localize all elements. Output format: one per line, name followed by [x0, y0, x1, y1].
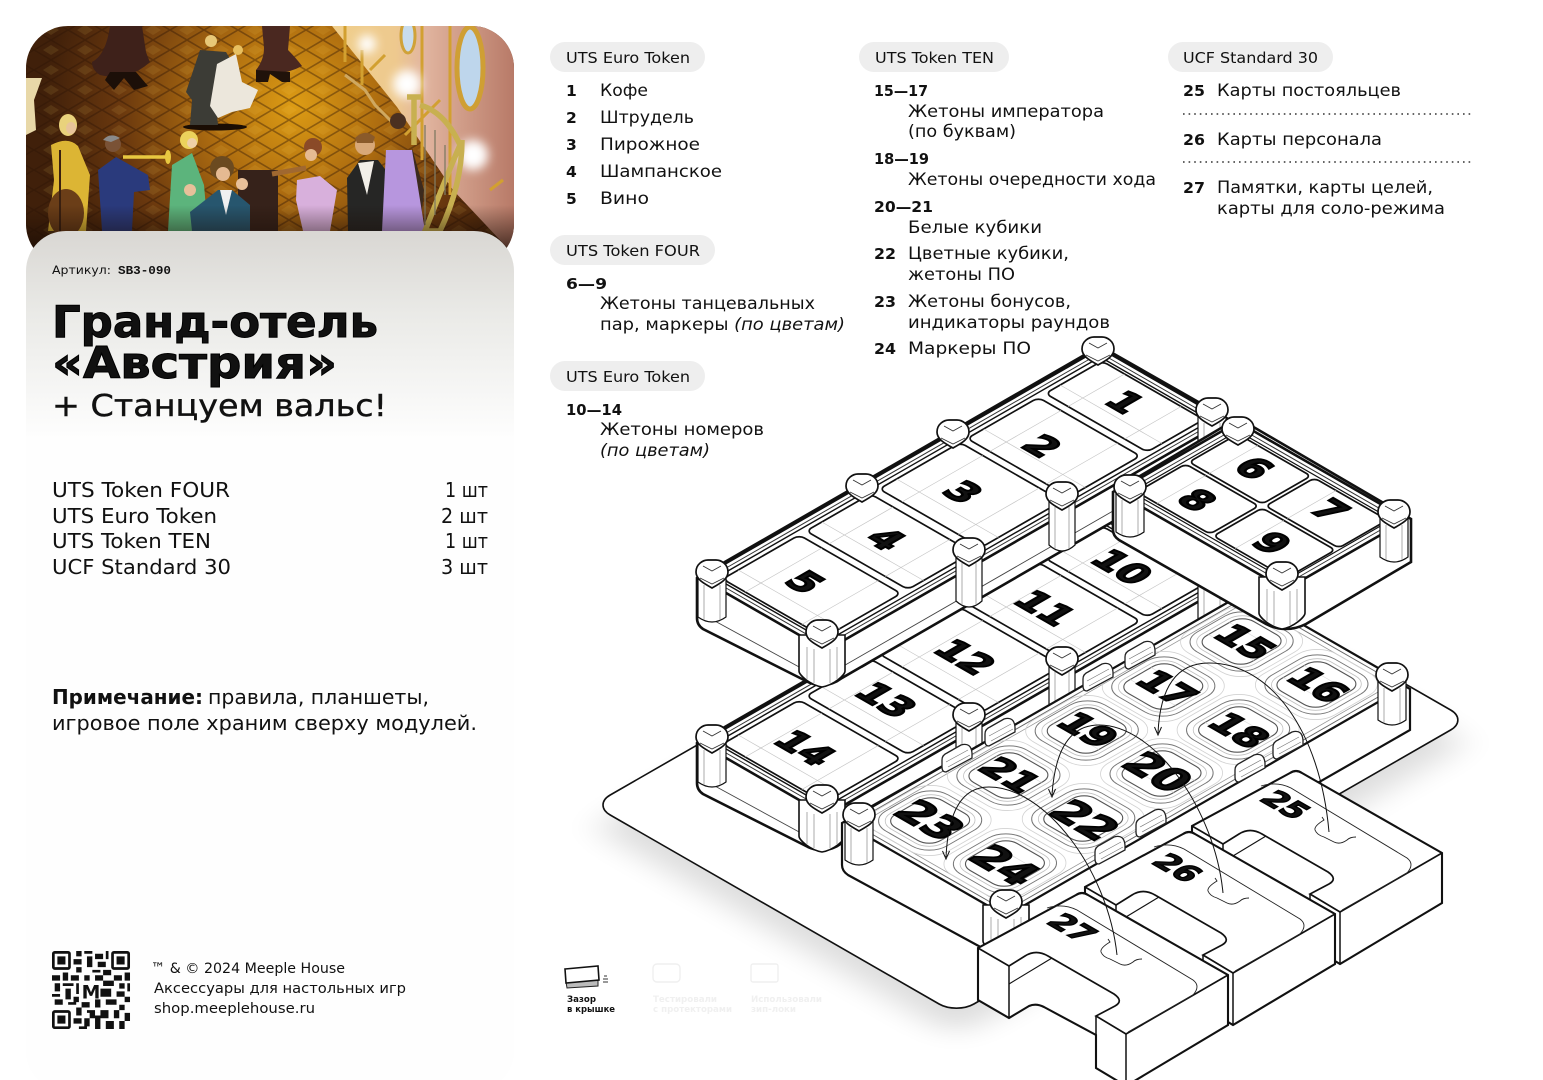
tray: compartments 1-5: 2 [1012, 429, 1071, 463]
column 2: UTS Token TEN contents: Белые кубики [908, 218, 1042, 238]
pill: UTS Euro Token: UTS Euro Token [566, 49, 690, 67]
column 1: UTS Token FOUR contents: Жетоны танцевальных [600, 294, 815, 314]
box: cards 25 [1192, 771, 1442, 964]
lid tray: compartments 15-24: 19 [1046, 707, 1129, 754]
column 1: UTS Token FOUR contents: пар, маркеры (по цветам) [600, 315, 845, 335]
illustration: hotel ballroom with musicians and dancers [26, 26, 514, 248]
box: cards 26: 26 [1143, 849, 1210, 887]
column 1: UTS Euro Token contents: 4 [566, 163, 577, 181]
column 2: UTS Token TEN contents: Цветные кубики, [908, 244, 1069, 264]
column 2: UTS Token TEN contents: индикаторы раундов [908, 313, 1110, 333]
dancing couple [183, 124, 247, 130]
tray: compartments 6-9: 7 [1300, 493, 1359, 527]
tray: compartments 10-14: 14 [763, 725, 846, 772]
icon: used zip-locks (faded): зип-локи [751, 1005, 796, 1015]
QR code: M [82, 982, 100, 1003]
icon: tested with sleeves (faded): с протекторами [653, 1005, 732, 1015]
lid tray: compartments 15-24: 20 [1111, 745, 1204, 799]
tray: compartments 1-5: 1 [1095, 385, 1154, 419]
column 1: UTS Euro Token contents: Кофе [600, 81, 648, 101]
tray: compartments 10-14: 12 [923, 634, 1006, 681]
tray: compartments 1-5: 4 [856, 522, 915, 556]
column 3: UCF Standard 30 contents: Памятки, карты целей, [1217, 178, 1433, 198]
icon: tested with sleeves (faded): Тестировали [653, 995, 717, 1005]
column 1: second UTS Euro Token contents: (по цветам) [600, 441, 710, 461]
base plate with shadow [593, 511, 1468, 1037]
column 1: UTS Euro Token contents: 5 [566, 190, 577, 208]
component list: UCF Standard 30 [52, 555, 231, 579]
column 2: UTS Token TEN contents: 22 [874, 245, 896, 263]
dancers background [92, 26, 150, 77]
pill: UTS Token FOUR [550, 235, 715, 265]
column 2: UTS Token TEN contents: Жетоны бонусов, [908, 292, 1071, 312]
column 1: UTS Euro Token contents: 2 [566, 109, 577, 127]
column 2: UTS Token TEN contents: 18—19 [874, 150, 929, 168]
tray: compartments 1-5: 3 [933, 475, 992, 509]
column 2: UTS Token TEN contents: 15—17 [874, 82, 928, 100]
icon: used zip-locks (faded): Использовали [751, 995, 822, 1005]
copyright footer [151, 961, 406, 1017]
arrow: from 25 to 17 [1154, 663, 1329, 832]
article number [52, 263, 171, 278]
component list: 1 шт [445, 478, 488, 502]
column 1: UTS Euro Token contents [550, 42, 722, 209]
tray: compartments 10-14: 11 [1003, 585, 1086, 632]
musicians [48, 141, 90, 231]
tray: compartments 6-9: 6 [1224, 451, 1283, 485]
panel: game info card [26, 19, 514, 1080]
title: + Станцуем вальс! [52, 389, 387, 424]
article number: Артикул: [52, 263, 111, 277]
lid tray: compartments 15-24 [842, 592, 1410, 957]
column 3: UCF Standard 30 contents [1168, 42, 1472, 219]
column 2: UTS Token TEN contents: Жетоны императора [908, 102, 1104, 122]
pill: UTS Token TEN [859, 42, 1009, 72]
box: cards 25: 25 [1251, 786, 1318, 824]
icon: gap in lid: Зазор [567, 995, 597, 1005]
component list: 3 шт [441, 555, 488, 579]
icon: gap in lid: в крышке [567, 1005, 615, 1015]
icon: used zip-locks (faded) [751, 964, 822, 1015]
column 1: UTS Euro Token contents: Пирожное [600, 135, 700, 155]
column 1: UTS Token FOUR contents [550, 235, 845, 335]
tray: compartments 6-9: 8 [1167, 483, 1226, 517]
pill: UCF Standard 30 [1168, 42, 1333, 72]
pill: UTS Euro Token [550, 42, 705, 72]
column 2: UTS Token TEN contents [859, 42, 1156, 359]
component list [52, 478, 488, 579]
pill: UCF Standard 30: UCF Standard 30 [1183, 49, 1318, 67]
lid tray: compartments 15-24: 21 [968, 752, 1051, 799]
lid tray: compartments 15-24: 16 [1276, 662, 1359, 709]
tray: compartments 10-14: 10 [1080, 544, 1163, 591]
column 2: UTS Token TEN contents: жетоны ПО [908, 265, 1015, 285]
card body with gradient [26, 231, 514, 1080]
column 3: UCF Standard 30 contents: Карты персонала [1217, 130, 1382, 150]
note [52, 685, 477, 735]
pill: UTS Token FOUR: UTS Token FOUR [566, 242, 700, 260]
column 1: second UTS Euro Token contents [550, 361, 764, 461]
lid tray: compartments 15-24: 24 [958, 838, 1051, 892]
note: Примечание: [52, 685, 203, 709]
column 2: UTS Token TEN contents: (по буквам) [908, 122, 1016, 142]
column 1: UTS Euro Token contents: 3 [566, 136, 577, 154]
icon: gap in lid [565, 966, 615, 1015]
component list: UTS Euro Token [52, 504, 217, 528]
arrow: from 27 to 23 [942, 787, 1117, 955]
tray: compartments 6-9 [1113, 417, 1411, 629]
component list: UTS Token TEN [52, 529, 211, 553]
box: cards 27 [978, 893, 1228, 1080]
box: cards 27: 27 [1038, 909, 1105, 947]
lid tray: compartments 15-24: 17 [1125, 665, 1208, 712]
copyright footer: ™ & © 2024 Meeple House [151, 961, 345, 977]
pill: UTS Token TEN: UTS Token TEN [875, 49, 994, 67]
QR code [52, 951, 130, 1029]
pill: UTS Euro Token: UTS Euro Token [566, 368, 690, 386]
tray: compartments 1-5 [696, 337, 1230, 687]
column 3: UCF Standard 30 contents: карты для соло-режима [1217, 199, 1445, 219]
column 1: UTS Euro Token contents: 1 [566, 82, 577, 100]
column 3: UCF Standard 30 contents: 26 [1183, 131, 1205, 149]
column 1: UTS Euro Token contents: Вино [600, 189, 649, 209]
lid tray: compartments 15-24: 22 [1038, 793, 1131, 847]
column 1: second UTS Euro Token contents: 10—14 [566, 401, 622, 419]
arrow: from 26 to 19 [1048, 725, 1223, 893]
tray: compartments 10-14: 13 [844, 677, 927, 724]
pill: UTS Euro Token [550, 361, 705, 391]
column 1: second UTS Euro Token contents: Жетоны номеров [600, 420, 764, 440]
component list: 1 шт [445, 529, 488, 553]
component list: UTS Token FOUR [52, 478, 230, 502]
note: игровое поле храним сверху модулей. [52, 711, 477, 735]
column 2: UTS Token TEN contents: 24 [874, 340, 896, 358]
title: «Австрия» [52, 338, 337, 389]
column 3: UCF Standard 30 contents: Карты постояльцев [1217, 81, 1401, 101]
lid tray: compartments 15-24: 18 [1198, 707, 1280, 754]
column 1: UTS Token FOUR contents: 6—9 [566, 275, 607, 293]
column 1: UTS Euro Token contents: Шампанское [600, 162, 722, 182]
copyright footer: Аксессуары для настольных игр [154, 981, 406, 997]
column 3: UCF Standard 30 contents: 27 [1183, 179, 1205, 197]
note: правила, планшеты, [208, 685, 429, 709]
title [52, 297, 387, 424]
tray: compartments 6-9: 9 [1242, 526, 1301, 560]
column 2: UTS Token TEN contents: 23 [874, 293, 896, 311]
column 2: UTS Token TEN contents: Жетоны очередности хода [908, 170, 1156, 190]
tray: compartments 10-14 [696, 502, 1230, 852]
column 3: UCF Standard 30 contents: 25 [1183, 82, 1205, 100]
box: cards 26 [1085, 832, 1335, 1025]
component list: 2 шт [441, 504, 488, 528]
column 2: UTS Token TEN contents: 20—21 [874, 198, 933, 216]
tray: compartments 1-5: 5 [775, 565, 834, 599]
column 1: UTS Euro Token contents: Штрудель [600, 108, 694, 128]
article number: SB3-090 [118, 264, 171, 278]
lid tray: compartments 15-24: 23 [883, 793, 976, 847]
copyright footer: shop.meeplehouse.ru [154, 1001, 315, 1017]
title: Гранд-отель [52, 297, 378, 348]
icon: tested with sleeves (faded) [653, 964, 732, 1015]
column 2: UTS Token TEN contents: Маркеры ПО [908, 339, 1031, 359]
lid tray: compartments 15-24: 15 [1203, 619, 1286, 666]
